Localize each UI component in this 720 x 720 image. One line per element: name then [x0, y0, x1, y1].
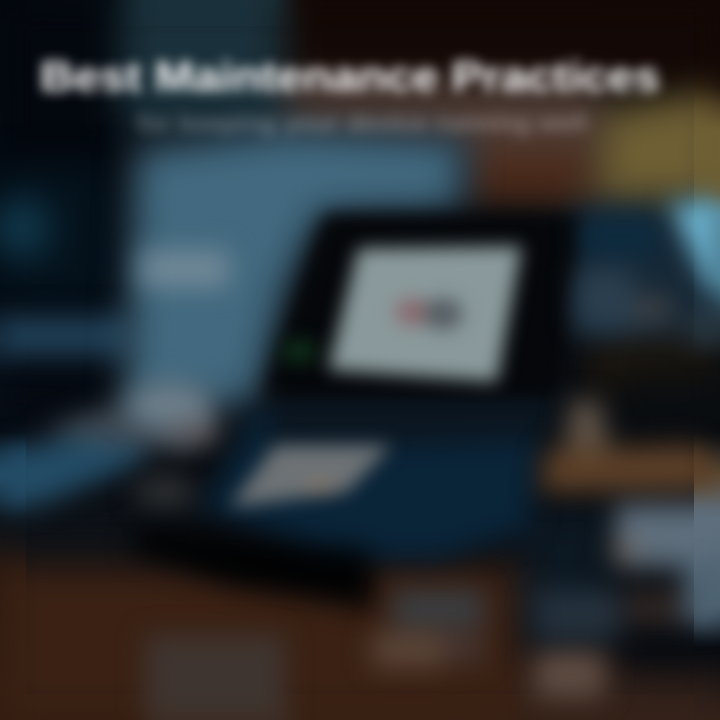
title: Best Maintenance Practices: [40, 53, 660, 101]
right desk items: [535, 215, 720, 698]
screen chart: [395, 298, 463, 330]
laptop screen: [328, 246, 522, 382]
table items: [145, 590, 484, 720]
laptop lid: [265, 215, 585, 395]
subtitle: for keeping your device running well: [137, 110, 587, 137]
laptop green light: [282, 340, 316, 362]
keyboard panel: [230, 445, 392, 507]
laptop base: [130, 390, 560, 610]
blue wall panel: [125, 130, 465, 510]
left dark monitor: [0, 165, 200, 510]
right bright object: [668, 198, 720, 290]
laptop: [130, 215, 585, 610]
